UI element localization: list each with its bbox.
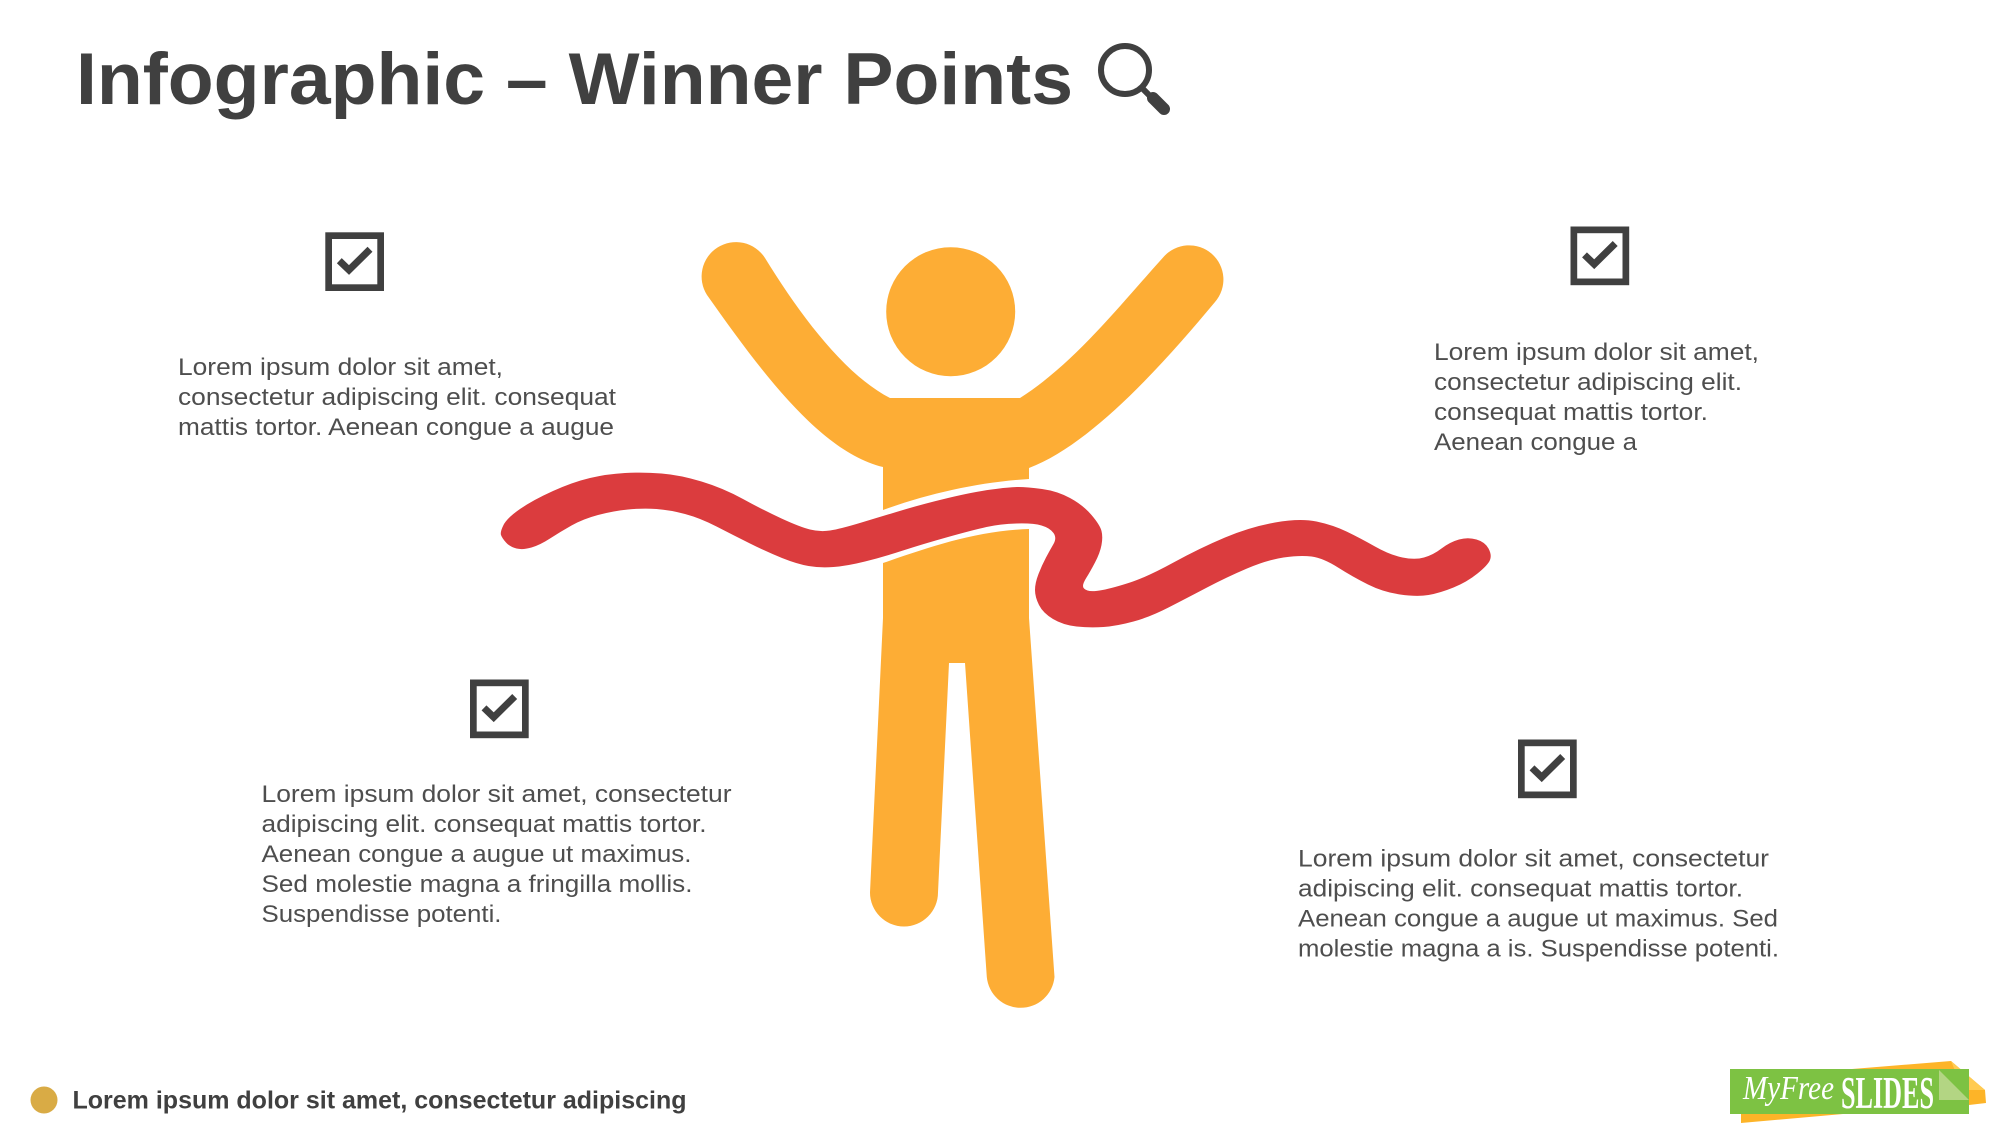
figure body	[702, 242, 1223, 1008]
text block: bottom right	[1298, 846, 1779, 962]
text block: bottom left: adipiscing elit. consequat mattis tortor.	[262, 811, 706, 838]
text block: top left	[178, 354, 616, 441]
logo: MyFree Slides: MyFree	[1742, 1070, 1834, 1107]
title: Infographic – Winner Points	[76, 39, 1073, 120]
text block: top left: Lorem ipsum dolor sit amet,	[178, 354, 503, 381]
text block: top right: consequat mattis tortor.	[1434, 399, 1708, 426]
icon: magnifying glass	[1101, 46, 1164, 109]
checkbox icon: bottom left	[473, 683, 525, 735]
text block: bottom right: adipiscing elit. consequat mattis tortor.	[1298, 876, 1743, 902]
text block: bottom left: Lorem ipsum dolor sit amet, consectetur	[262, 781, 732, 808]
logo: MyFree Slides: SLIDES	[1841, 1068, 1934, 1118]
finish-line ribbon	[501, 473, 1491, 627]
text block: top right: Lorem ipsum dolor sit amet,	[1434, 339, 1759, 366]
text block: bottom left: Sed molestie magna a fringilla mollis.	[262, 871, 692, 898]
checkbox icon: top left	[329, 236, 381, 288]
footer bullet dot	[30, 1086, 58, 1114]
text block: top right: Aenean congue a	[1434, 429, 1638, 456]
text block: bottom left: Aenean congue a augue ut maximus.	[262, 841, 692, 868]
footer caption: Lorem ipsum dolor sit amet, consectetur adipiscing	[72, 1086, 686, 1114]
text block: bottom right: Lorem ipsum dolor sit amet, consectetur	[1298, 846, 1769, 872]
figure: winner with raised arms	[501, 242, 1491, 1008]
text block: bottom left	[262, 781, 732, 928]
text block: bottom right: Aenean congue a augue ut maximus. Sed	[1298, 906, 1778, 932]
text block: bottom left: Suspendisse potenti.	[262, 901, 502, 928]
text block: top left: mattis tortor. Aenean congue a augue	[178, 414, 614, 441]
text block: top right: consectetur adipiscing elit.	[1434, 369, 1742, 396]
figure head	[886, 247, 1015, 376]
text block: top right	[1434, 339, 1759, 456]
checkbox icon: bottom right	[1521, 743, 1573, 795]
text block: bottom right: molestie magna a is. Suspendisse potenti.	[1298, 936, 1779, 962]
logo: MyFree Slides	[1730, 1061, 1986, 1123]
text block: top left: consectetur adipiscing elit. consequat	[178, 384, 616, 411]
checkbox icon: top right	[1574, 230, 1626, 282]
